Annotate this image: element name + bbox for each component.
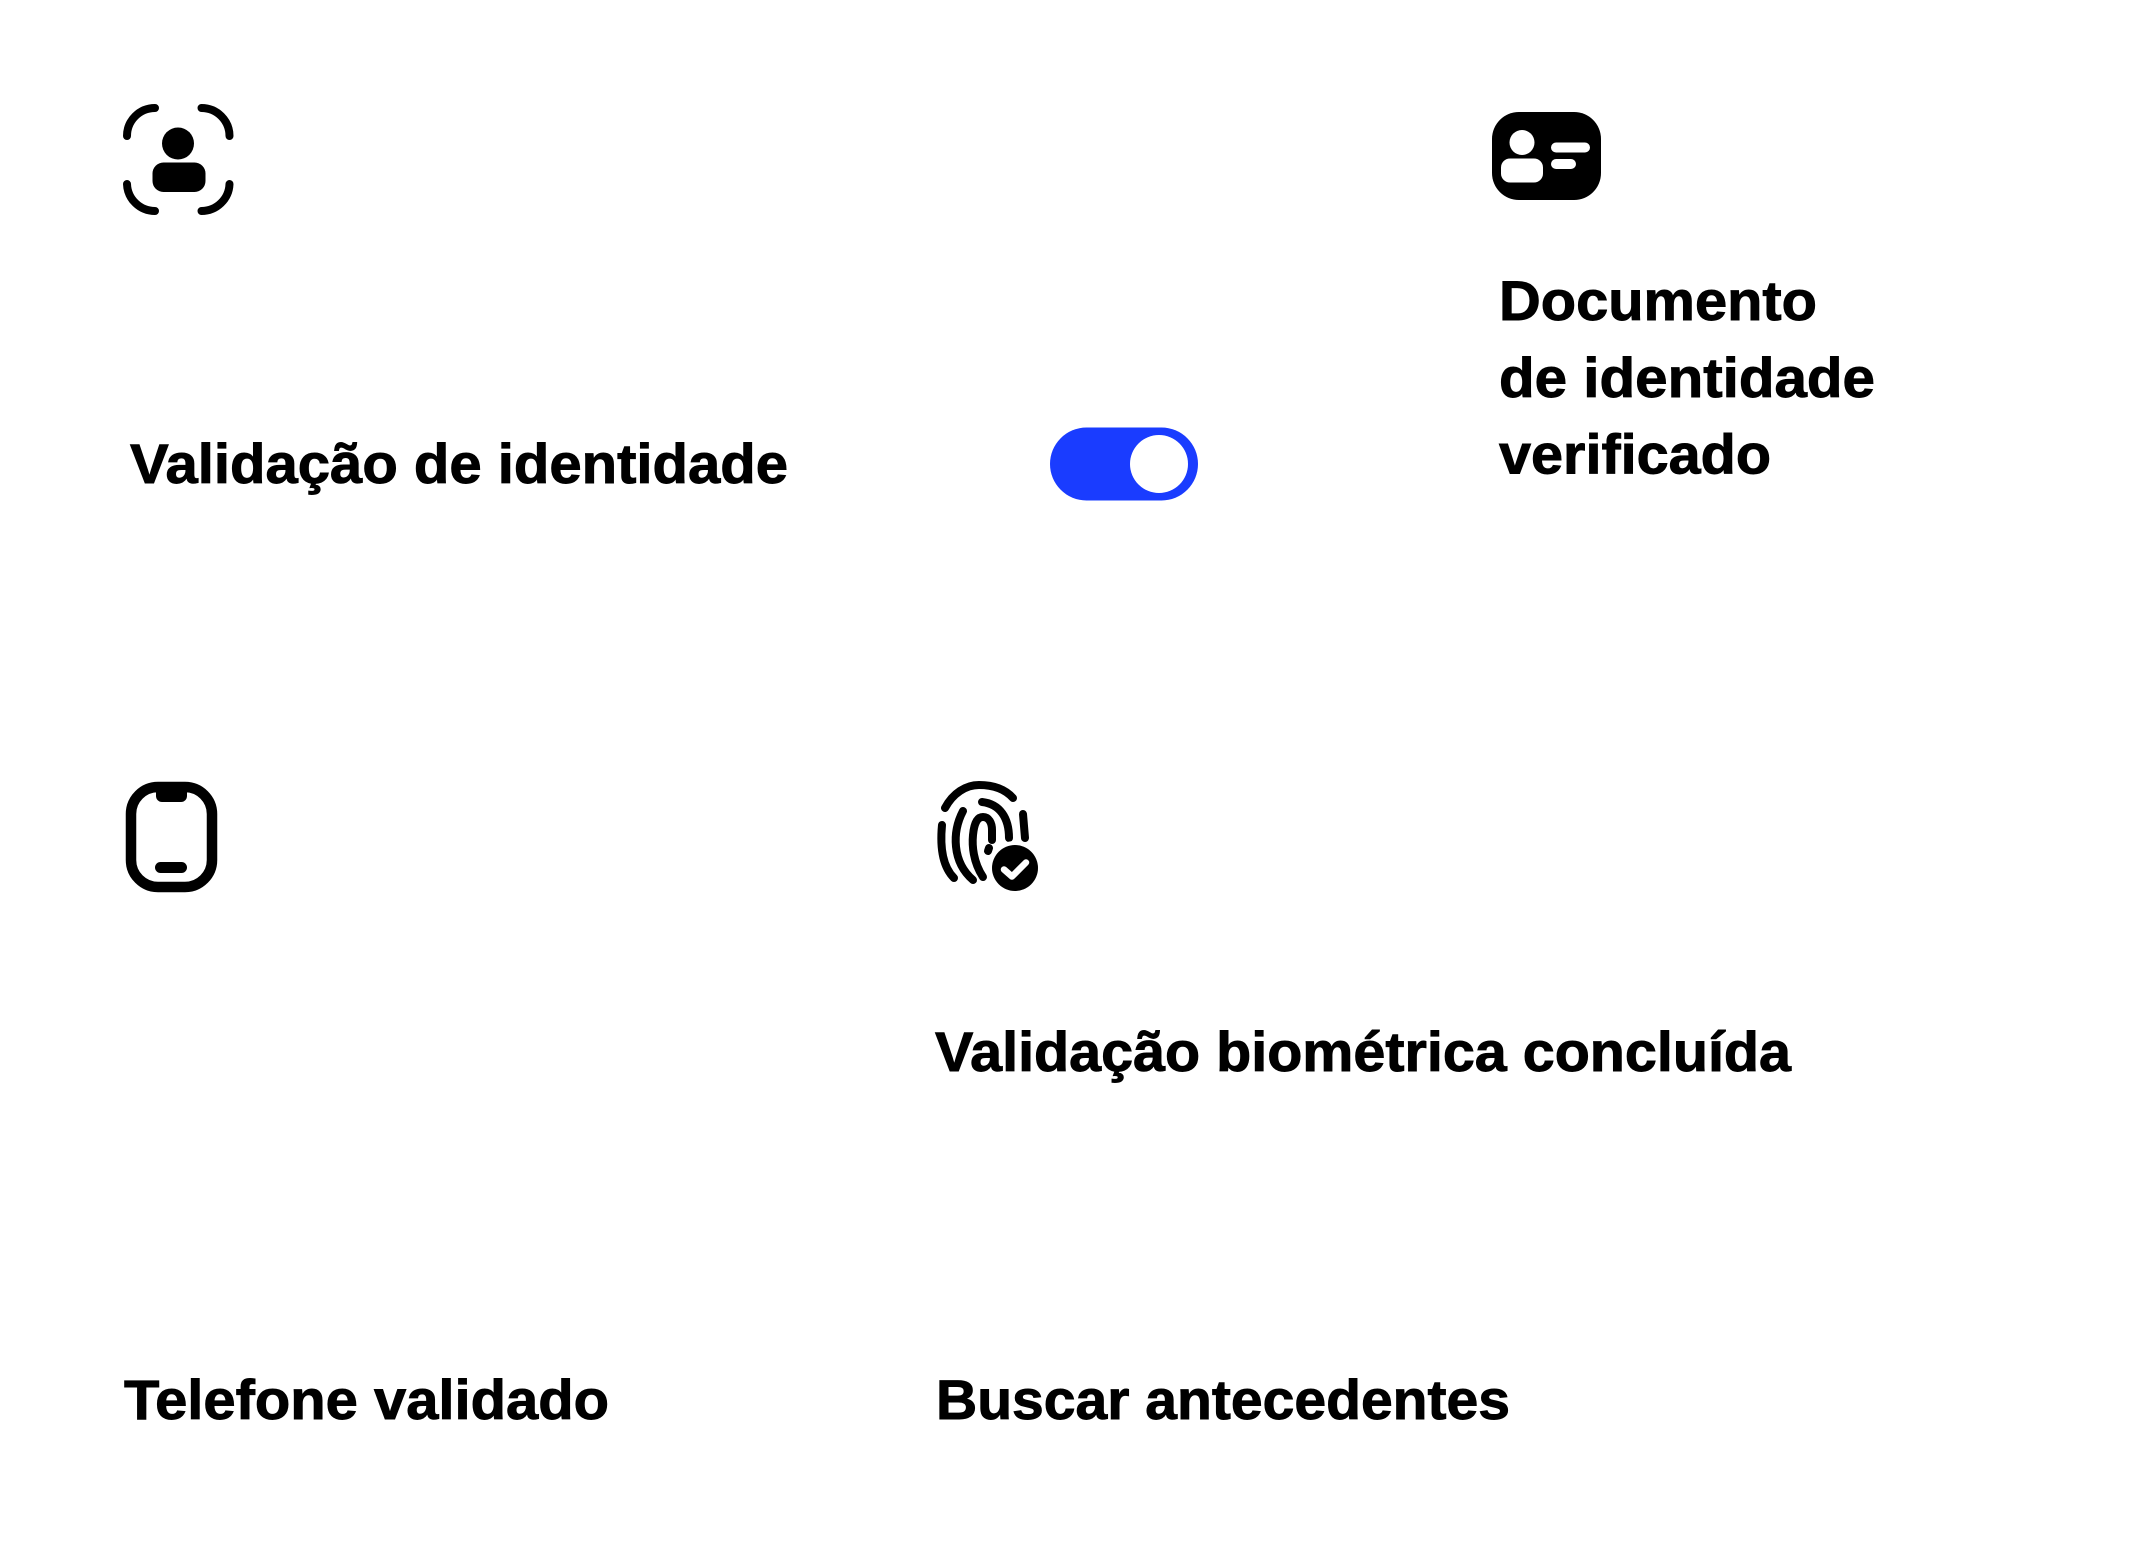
text block: Documento de identidade verificado: de identidade xyxy=(1499,346,1875,409)
icon: fingerprint with check xyxy=(941,785,1042,895)
icon: phone xyxy=(131,785,212,887)
toggle switch xyxy=(1050,428,1198,500)
text block: Documento de identidade verificado: Documento xyxy=(1499,269,1817,332)
heading: Buscar antecedentes: Buscar antecedentes xyxy=(936,1368,1510,1431)
icon: face scan person xyxy=(127,108,230,211)
text block: Documento de identidade verificado: verificado xyxy=(1499,422,1771,486)
text block: Documento de identidade verificado xyxy=(1499,269,1875,486)
heading: Validação de identidade: Validação de identidade xyxy=(130,432,788,495)
heading: Telefone validado: Telefone validado xyxy=(124,1368,609,1431)
heading: Validação biométrica concluída: Validação biométrica concluída xyxy=(935,1020,1792,1083)
icon: identity card xyxy=(1492,112,1601,200)
